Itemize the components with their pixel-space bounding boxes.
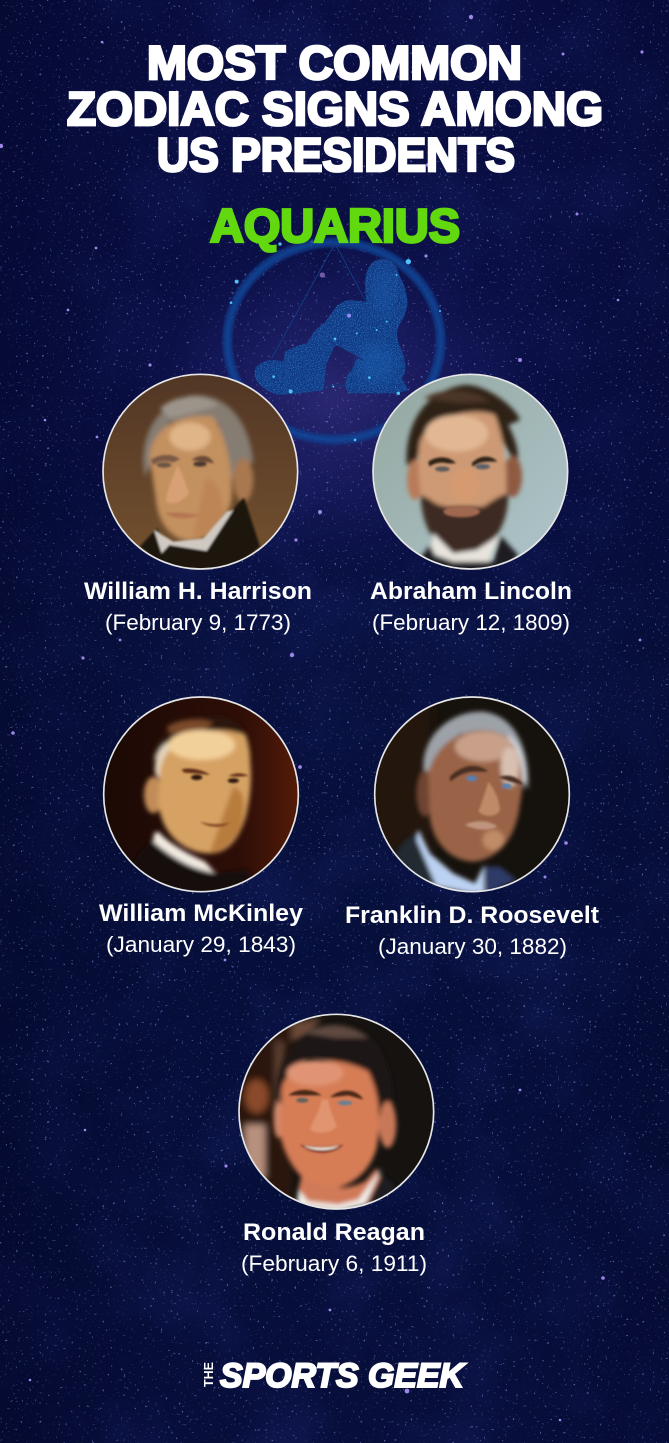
logo: The Sports Geek: SPORTS GEEK (220, 1357, 466, 1395)
water bearer figure (255, 259, 408, 395)
panel: Ronald Reagan (235, 1011, 438, 1276)
constellation stars (230, 242, 441, 441)
birth date: (February 6, 1911) (241, 1251, 427, 1276)
title: US PRESIDENTS (157, 129, 515, 182)
title: ZODIAC SIGNS AMONG (67, 83, 603, 136)
portrait: Franklin D. Roosevelt (370, 693, 573, 897)
panel: Franklin D. Roosevelt (345, 693, 599, 959)
birth date: (January 30, 1882) (378, 934, 567, 959)
name: Abraham Lincoln (370, 578, 572, 605)
portrait: Abraham Lincoln (370, 372, 573, 578)
subtitle: Aquarius: AQUARIUS (210, 200, 460, 253)
panel: William McKinley (99, 693, 303, 957)
constellation lines (272, 243, 400, 386)
name: William McKinley (99, 900, 303, 927)
panel: Abraham Lincoln (370, 372, 573, 635)
birth date: (January 29, 1843) (106, 932, 296, 957)
zodiac constellation: Aquarius (227, 242, 441, 441)
portrait: William H. Harrison (100, 372, 303, 572)
name: Ronald Reagan (243, 1219, 425, 1246)
title (67, 37, 603, 182)
title: MOST COMMON (147, 37, 522, 90)
birth date: (February 9, 1773) (105, 610, 291, 635)
logo: The Sports Geek: THE (201, 1362, 216, 1387)
portrait: William McKinley (100, 693, 303, 897)
birth date: (February 12, 1809) (372, 610, 570, 635)
constellation ring (227, 242, 441, 440)
panel: William H. Harrison (84, 372, 312, 635)
name: Franklin D. Roosevelt (345, 902, 599, 929)
name: William H. Harrison (84, 578, 312, 605)
portrait: Ronald Reagan (235, 1011, 438, 1215)
